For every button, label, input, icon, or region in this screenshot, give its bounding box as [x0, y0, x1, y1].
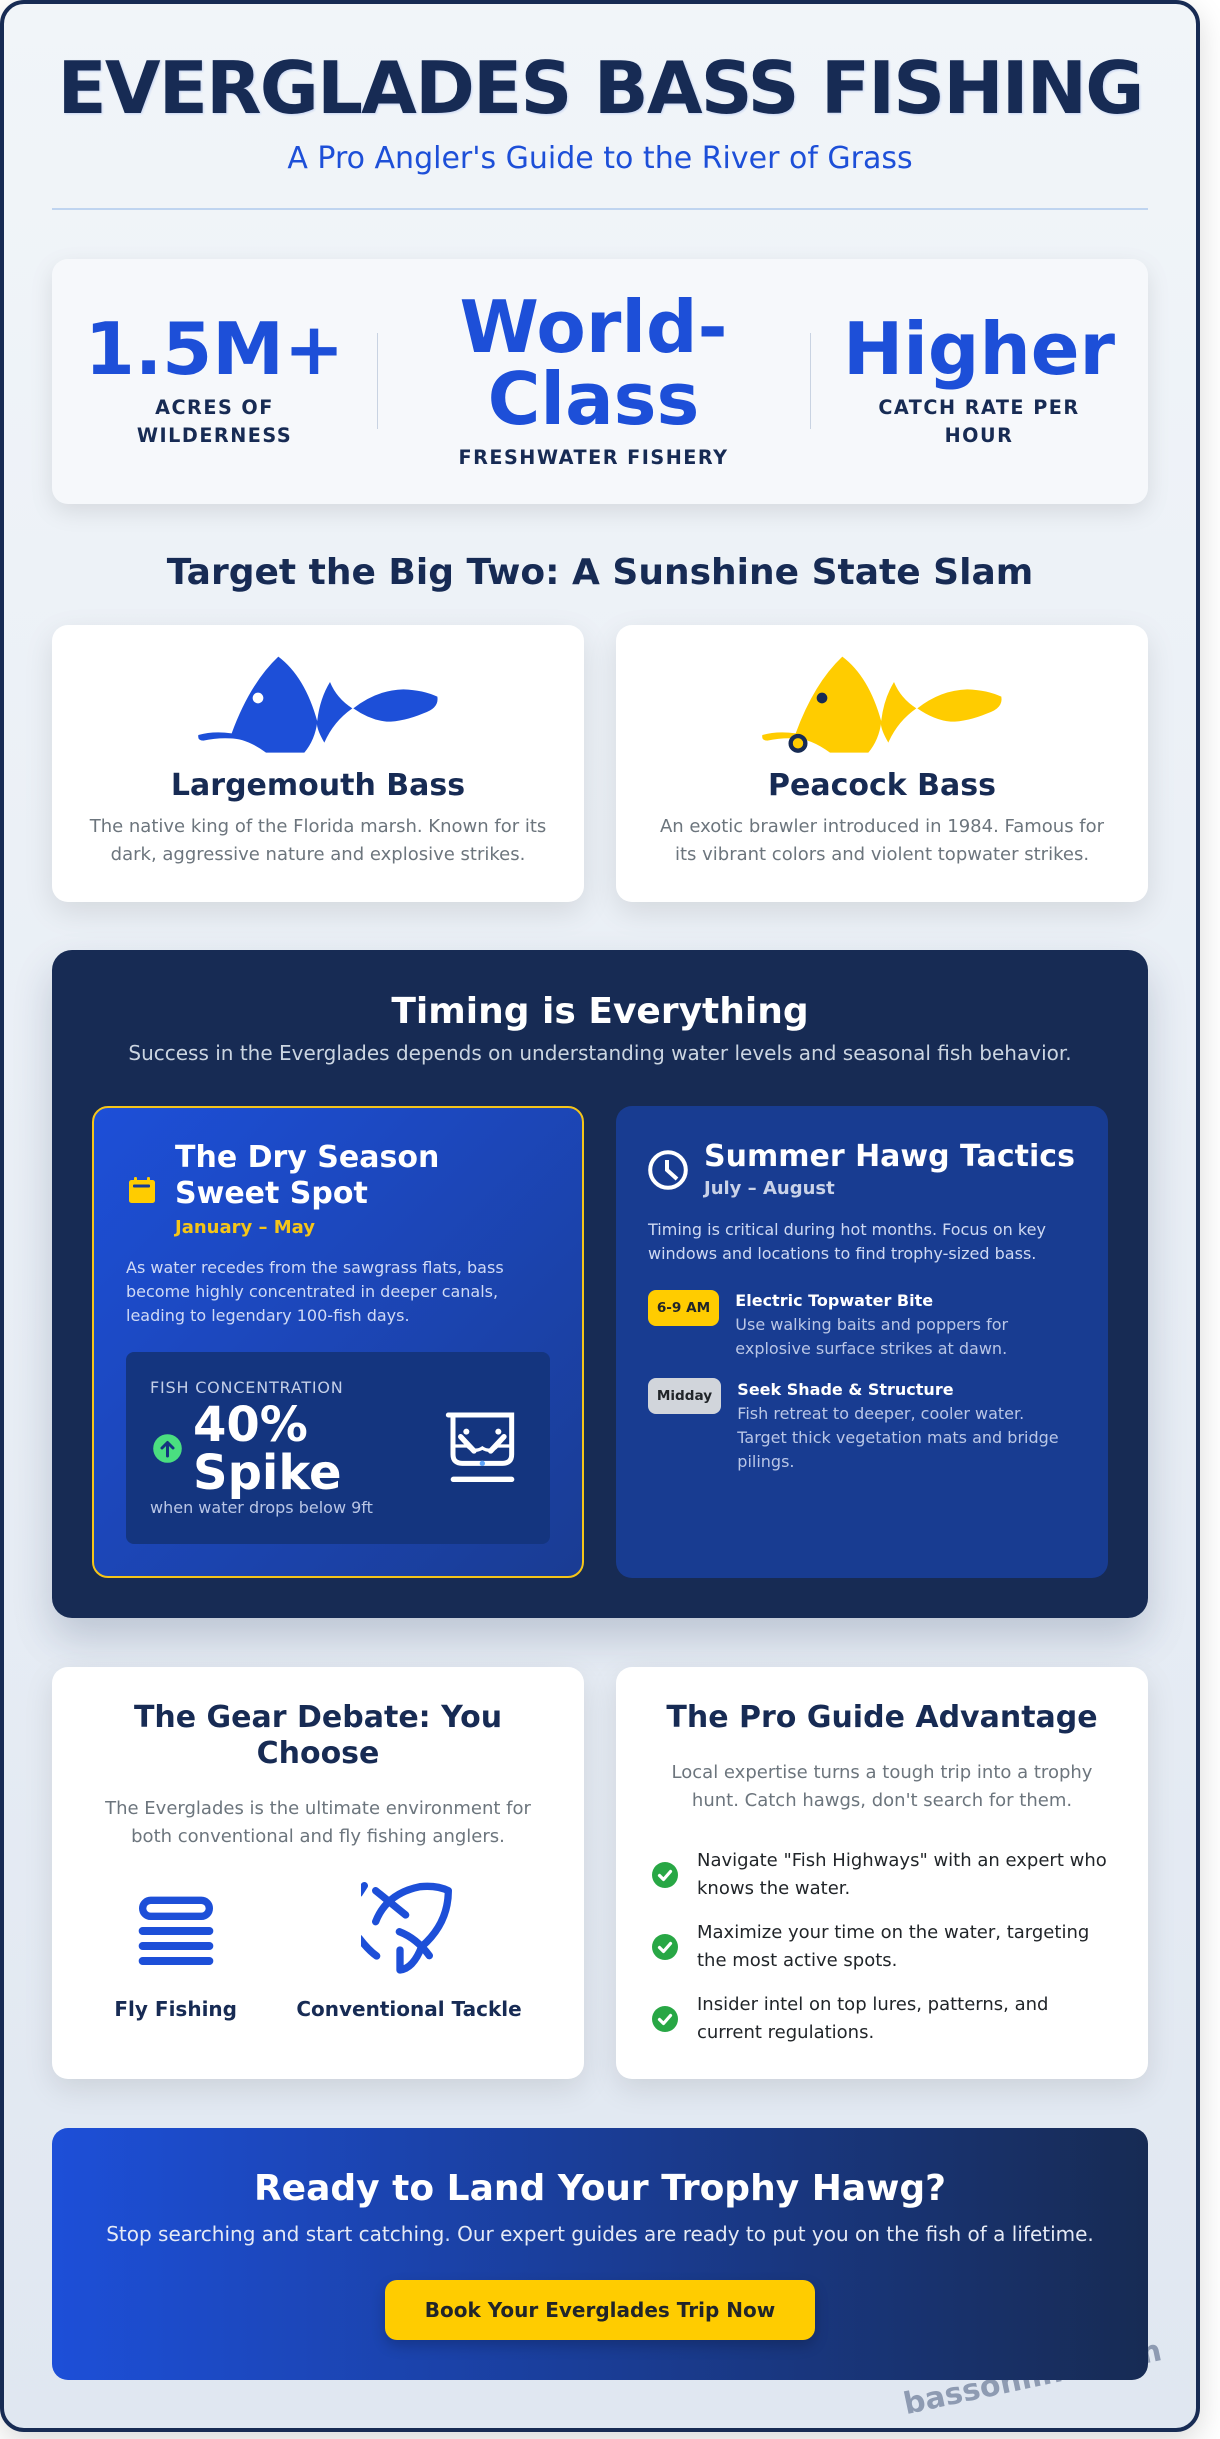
text: summer description [648, 1220, 1046, 1262]
heading: dry season [175, 1140, 439, 1210]
text: gear description: The Everglades is the ultimate environment for [105, 1798, 531, 1819]
heading: dry season: The Dry Season [175, 1140, 439, 1174]
text: dry season description: become highly concentrated in deeper canals, [126, 1282, 498, 1301]
text: guide description: Local expertise turns a tough trip into a trophy [672, 1762, 1092, 1783]
stat: higher catch rate: HOUR [945, 424, 1013, 447]
icon: check [652, 1862, 678, 1888]
stat: acres: 1.5M+ [85, 307, 344, 391]
stat: acres: WILDERNESS [137, 424, 292, 447]
icon: largemouth fish [198, 656, 438, 753]
heading: gear debate: Choose [257, 1736, 379, 1770]
text: summer months: July – August [704, 1178, 835, 1199]
text: peacock description: An exotic brawler introduced in 1984. Famous for [660, 816, 1104, 837]
text: shade tactic [737, 1380, 1059, 1470]
panel: peacock bass [616, 625, 1148, 902]
text: largemouth description: dark, aggressive nature and explosive strikes. [111, 844, 525, 865]
text: dry season description: As water recedes from the sawgrass flats, bass [126, 1258, 504, 1277]
icon: check [652, 2006, 678, 2032]
badge: midday: Midday [657, 1388, 712, 1404]
text: fish highways: Navigate "Fish Highways" with an expert who [697, 1850, 1107, 1871]
heading: gear debate: The Gear Debate: You [134, 1700, 502, 1734]
text: topwater tactic [735, 1291, 1008, 1358]
text: maximize time: the most active spots. [697, 1950, 897, 1971]
panel: pro guide advantage [616, 1667, 1148, 2079]
text: peacock description: its vibrant colors and violent topwater strikes. [675, 844, 1089, 865]
text: dry season description [126, 1258, 504, 1325]
text: fish highways [697, 1850, 1107, 1899]
badge: 6-9 AM [648, 1290, 719, 1326]
heading: pro guide: The Pro Guide Advantage [666, 1700, 1098, 1734]
heading: timing: Timing is Everything [391, 991, 809, 1032]
text: timing intro: Success in the Everglades depends on understanding water levels and seasonal fish behavior. [128, 1041, 1072, 1065]
text: gear description: both conventional and fly fishing anglers. [131, 1826, 505, 1847]
text: dry season months: January – May [175, 1217, 315, 1238]
list item: fish highways [652, 1850, 1107, 1899]
text: concentration note: when water drops below 9ft [150, 1498, 373, 1517]
text: guide description: hunt. Catch hawgs, don't search for them. [692, 1790, 1072, 1811]
text: insider intel: Insider intel on top lures, patterns, and [697, 1994, 1048, 2015]
text: shade tactic: Fish retreat to deeper, cooler water. [737, 1404, 1024, 1422]
heading: gear debate [134, 1700, 502, 1770]
text: shade tactic: pilings. [737, 1452, 795, 1470]
heading: big two: Target the Big Two: A Sunshine State Slam [167, 552, 1033, 592]
text: largemouth description: The native king of the Florida marsh. Known for its [90, 816, 546, 837]
panel: gear debate [52, 1667, 584, 2079]
stat: higher catch rate: CATCH RATE PER [878, 396, 1080, 419]
icon: bass in shallow tank [446, 1412, 514, 1482]
stat: world-class: World- [460, 285, 727, 369]
title: EVERGLADES BASS FISHING [57, 46, 1143, 130]
panel: dry season [92, 1106, 584, 1578]
subtitle: A Pro Angler's Guide to the River of Grass [287, 141, 913, 176]
label: conventional tackle: Conventional Tackle [296, 1997, 522, 2021]
text: dry season description: leading to legendary 100-fish days. [126, 1306, 410, 1325]
text: topwater tactic: Electric Topwater Bite [735, 1291, 933, 1310]
stat: acres: ACRES OF [155, 396, 274, 419]
text: insider intel: current regulations. [697, 2022, 874, 2043]
text: gear description [105, 1798, 531, 1847]
watermark: bassonline.com [901, 2333, 1165, 2422]
icon: up arrow [153, 1434, 182, 1463]
icon: clock [648, 1150, 688, 1190]
stat: higher catch rate [843, 307, 1115, 447]
list item: maximize time [652, 1922, 1089, 1971]
text: topwater tactic: Use walking baits and poppers for [735, 1315, 1008, 1334]
text: summer description: Timing is critical during hot months. Focus on key [648, 1220, 1046, 1238]
text: insider intel [697, 1994, 1048, 2043]
text: shade tactic: Seek Shade & Structure [737, 1380, 954, 1398]
text: maximize time: Maximize your time on the water, targeting [697, 1922, 1089, 1943]
heading: cta: Ready to Land Your Trophy Hawg? [254, 2168, 946, 2208]
text: cta description: Stop searching and start catching. Our expert guides are ready to put you on the fish of a lifetime. [106, 2222, 1094, 2246]
heading: peacock bass: Peacock Bass [768, 768, 996, 803]
text: guide description [672, 1762, 1092, 1811]
text: fish highways: knows the water. [697, 1878, 850, 1899]
text: 40% spike: Spike [193, 1445, 342, 1501]
text: 40% spike [193, 1397, 342, 1501]
button: book trip: Book Your Everglades Trip Now [425, 2298, 775, 2322]
badge: midday [648, 1378, 721, 1414]
heading: summer tactics: Summer Hawg Tactics [704, 1138, 1075, 1174]
text: maximize time [697, 1922, 1089, 1971]
text: peacock description [660, 816, 1104, 865]
text: summer description: windows and locations to find trophy-sized bass. [648, 1244, 1036, 1262]
panel: timing [52, 950, 1148, 1618]
stat: acres [85, 307, 344, 447]
label: fly fishing: Fly Fishing [114, 1997, 237, 2021]
panel: fish concentration [126, 1352, 550, 1544]
stat: world-class [458, 285, 729, 469]
text: shade tactic: Target thick vegetation mats and bridge [737, 1428, 1059, 1446]
icon: calendar [129, 1177, 155, 1203]
panel: key stats [52, 259, 1148, 504]
heading: largemouth bass: Largemouth Bass [171, 768, 465, 803]
icon: conventional tackle [361, 1882, 452, 1974]
panel: largemouth bass [52, 625, 584, 902]
stat: world-class: FRESHWATER FISHERY [458, 446, 729, 469]
list item: insider intel [652, 1994, 1048, 2043]
text: concentration label: FISH CONCENTRATION [150, 1378, 344, 1396]
icon: peacock fish [762, 656, 1002, 753]
panel: call to action [52, 2128, 1148, 2380]
panel: summer tactics [616, 1106, 1108, 1578]
icon: check [652, 1934, 678, 1960]
text: topwater tactic: explosive surface strikes at dawn. [735, 1339, 1007, 1358]
stat: higher catch rate: Higher [843, 307, 1115, 391]
text: largemouth description [90, 816, 546, 865]
icon: fly fishing [138, 1896, 214, 1965]
stat: world-class: Class [488, 357, 699, 441]
button: book trip [385, 2280, 815, 2340]
badge: 6-9 AM: 6-9 AM [657, 1300, 710, 1316]
heading: dry season: Sweet Spot [175, 1176, 368, 1210]
text: 40% spike: 40% [193, 1397, 308, 1453]
